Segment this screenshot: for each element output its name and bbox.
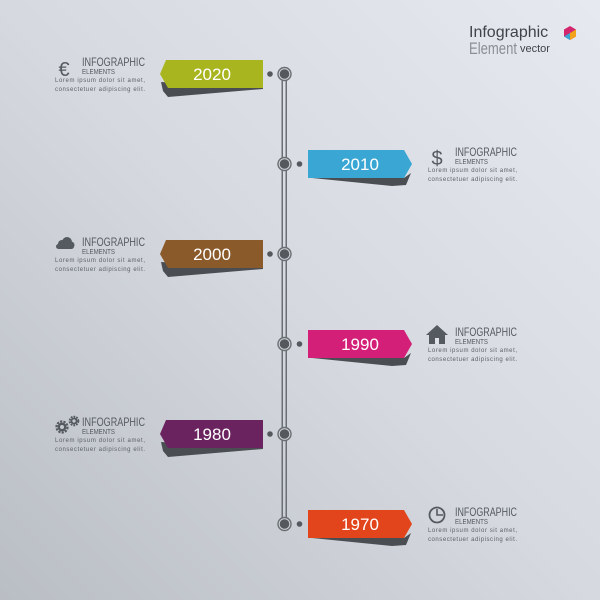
item 1980: consectetuer adipiscing elit. (55, 447, 145, 453)
item 2010: consectetuer adipiscing elit. (428, 177, 517, 183)
nodes (267, 68, 302, 530)
item 1980 (55, 415, 263, 457)
item 1970: Lorem ipsum dolor sit amet, (428, 528, 517, 534)
logo: Element (469, 39, 517, 58)
item 1980: 1980 (193, 425, 231, 444)
logo: Infographic (469, 24, 548, 41)
item 2020: € (58, 59, 70, 81)
item 1970: ELEMENTS (455, 517, 488, 526)
item 1970: 1970 (341, 515, 379, 534)
logo (469, 24, 576, 58)
item 1990: 1990 (341, 335, 379, 354)
item 2020: Lorem ipsum dolor sit amet, (55, 78, 145, 84)
item 2010: INFOGRAPHIC (455, 145, 517, 159)
item 2000: consectetuer adipiscing elit. (55, 267, 145, 273)
item 2010: 2010 (341, 155, 379, 174)
item 1990: INFOGRAPHIC (455, 325, 517, 339)
item 1990: ELEMENTS (455, 337, 488, 346)
item 2020: consectetuer adipiscing elit. (55, 87, 145, 93)
item 2020: ELEMENTS (82, 67, 115, 76)
item 1990: Lorem ipsum dolor sit amet, (428, 348, 517, 354)
item 1970: consectetuer adipiscing elit. (428, 537, 517, 543)
item 2000: 2000 (193, 245, 231, 264)
item 2000: Lorem ipsum dolor sit amet, (55, 258, 145, 264)
item 1990: consectetuer adipiscing elit. (428, 357, 517, 363)
item 2010 (308, 145, 517, 186)
item 1980: ELEMENTS (82, 427, 115, 436)
item 1970: INFOGRAPHIC (455, 505, 517, 519)
item 2020: INFOGRAPHIC (82, 55, 145, 69)
logo: vector (520, 43, 550, 55)
item 2020 (55, 55, 263, 97)
item 2010: Lorem ipsum dolor sit amet, (428, 168, 517, 174)
item 2000: ELEMENTS (82, 247, 115, 256)
item 2000: INFOGRAPHIC (82, 235, 145, 249)
item 2020: 2020 (193, 65, 231, 84)
timeline line (282, 74, 287, 524)
item 1980: INFOGRAPHIC (82, 415, 145, 429)
item 2010: $ (431, 148, 443, 170)
item 2010: ELEMENTS (455, 157, 488, 166)
item 1990 (308, 325, 517, 366)
item 1970 (308, 505, 517, 546)
item 2000 (55, 235, 263, 277)
item 1980: Lorem ipsum dolor sit amet, (55, 438, 145, 444)
